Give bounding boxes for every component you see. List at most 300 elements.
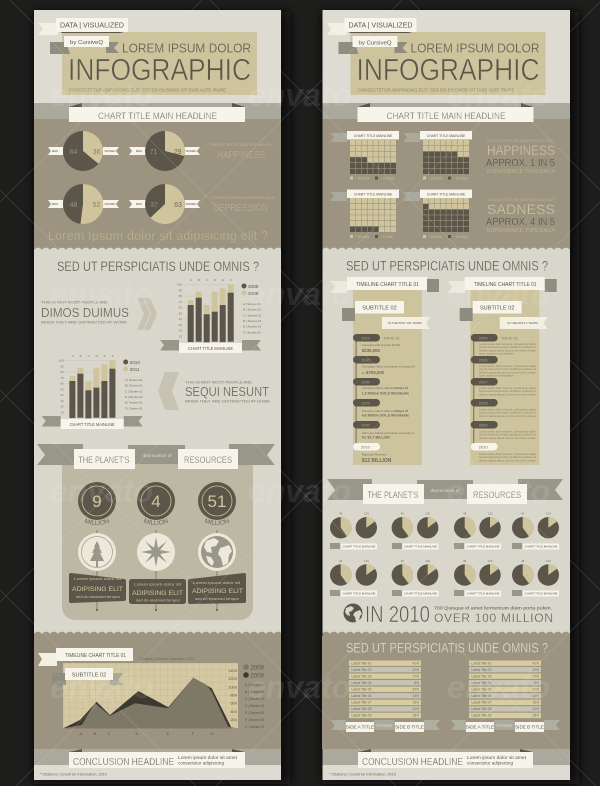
header: right: CONSECTETUR ADIPISICING ELIT, SED DO EIUSMOD SIT DUIS AUTE IRURE — [358, 88, 515, 92]
stat: 51 million: MILLION — [204, 518, 230, 525]
legend: D | Stories 01 — [243, 319, 261, 323]
text block: sadness approx: SADNESS — [487, 201, 555, 217]
heading: left section two: SED UT PERSPICIATIS UNDE OMNIS ? — [57, 258, 259, 274]
table: right: 28% — [533, 714, 539, 718]
bar chart: lower: E — [104, 354, 106, 358]
axis labels: G — [210, 731, 214, 736]
table: right: Latest Title 06 — [472, 694, 492, 698]
text block: dimos duimus: THIS IS WHY MOST PEOPLE ARE — [41, 300, 109, 304]
pie chart: happiness 64/36: MEN — [52, 149, 58, 153]
watermark: envato — [248, 669, 351, 705]
small pie charts: 129 — [364, 559, 369, 563]
side titles: right: SIDE B TITLE — [515, 724, 544, 730]
timeline column 2: TIMELINE CHART TITLE 01 — [474, 282, 537, 288]
text block: dimos duimus: DIMOS DUIMUS — [41, 305, 129, 320]
paragraphs: dolore magna aliqua ut enim ad minim veniam — [479, 348, 537, 352]
legend: A | Stories 01 — [125, 378, 143, 382]
bar chart: upper: 30 — [179, 323, 182, 327]
bar chart: lower: 30 — [60, 399, 64, 403]
watermark: envato — [447, 669, 550, 705]
waffle chart: bottom left: ~ 43 Units — [355, 235, 370, 239]
text block: sadness approx: APPROX. 4 IN 5 — [486, 217, 555, 228]
small pie charts: CHART TITLE MAINLINE — [525, 592, 558, 596]
paragraphs: sed do eiusmod tempor incididunt ut labore et — [479, 367, 536, 371]
timeline column 2: TOPIC 01 — [501, 336, 518, 340]
bar chart: upper: 60 — [179, 306, 182, 310]
timeline column 1: SUBTITLE 02 — [362, 306, 397, 312]
small pie charts: 48 — [401, 559, 404, 563]
pills — [471, 334, 498, 450]
text block: dimos duimus: WHEN THEY ARE DISTRACTED AT WORK — [41, 320, 128, 324]
pie chart: depression 48/52: 48 — [70, 202, 77, 209]
citation: * Citations | Credit for Information, 2010 — [138, 657, 194, 661]
bar chart: upper: A — [190, 278, 192, 282]
paragraphs: dolore magna aliqua ut enim ad minim veniam — [479, 458, 537, 462]
small pie charts: 129 — [487, 559, 493, 563]
timeline column 1: TIMELINE CHART TITLE 01 — [356, 282, 419, 288]
legend — [123, 360, 143, 410]
waffle chart: top left: ~ 19 Units — [380, 176, 395, 180]
timeline column 2: SUBTITLE 02 — [480, 306, 514, 312]
events: Company Name purchases Company B — [362, 365, 415, 369]
table: left: Latest Title 05 — [352, 688, 372, 692]
legend: F | Stories 01 — [243, 330, 261, 334]
table: left — [349, 660, 421, 718]
table: right: Latest Title 08 — [472, 707, 492, 711]
paragraphs: Lorem ipsum dolor sit amet, consectetur adipis — [479, 452, 537, 456]
banner: left — [69, 573, 126, 603]
table: left: 87% — [413, 688, 419, 692]
header: right: DATA | VISUALIZED — [348, 22, 412, 30]
legend: E | Stories 01 — [243, 325, 261, 329]
table: left: 87% — [413, 668, 419, 672]
timeline column 1: 1970 — [361, 400, 371, 406]
table: left: 28% — [413, 714, 419, 718]
bar chart: upper: 20 — [179, 329, 182, 333]
table: right: 27% — [533, 674, 539, 678]
legend: C | Stories 07 — [245, 725, 264, 729]
small pie charts — [330, 512, 559, 596]
axis labels: 400 — [230, 709, 238, 714]
icon: chevrons right — [137, 298, 157, 330]
watermark: envato — [447, 77, 550, 113]
header: right — [326, 18, 546, 95]
subtitle: LOREM IPSUM DOLOR — [122, 40, 251, 56]
timeline column 2: 2006 — [479, 358, 488, 362]
text block: sequi nesunt — [185, 380, 271, 404]
bar chart: upper: 80 — [179, 294, 182, 298]
legend: D | Stories 04 — [245, 704, 264, 708]
connector lines — [97, 530, 217, 610]
side titles: right — [451, 720, 560, 732]
side titles: left: Exchange — [377, 724, 392, 728]
chart area — [63, 663, 238, 728]
table: left: 41% — [413, 662, 419, 666]
watermark: envato — [50, 276, 153, 312]
axis labels: 1000 — [228, 684, 238, 690]
conclusion: right — [358, 749, 533, 768]
bar chart: upper: D — [214, 278, 217, 282]
timeline column 1: 1910 — [361, 336, 371, 340]
table: left: 64% — [413, 694, 419, 698]
timeline column 2: 2007 — [479, 380, 488, 384]
stat: over 100 million: 700 Quisque id amet fermentum diam porta pulvin. — [434, 606, 552, 610]
legend: F | Stories 06 — [245, 718, 264, 722]
text block: happiness approx — [486, 139, 556, 175]
side titles: right: Exchange — [497, 724, 512, 728]
pie chart: happiness 71/29: WOMEN — [185, 149, 197, 153]
paragraphs: dolore magna aliqua ut enim ad minim veniam — [479, 392, 537, 396]
table: left: 41% — [413, 707, 419, 711]
paragraphs: sed do eiusmod tempor incididunt ut labore et — [479, 345, 536, 349]
paragraphs: sed do eiusmod tempor incididunt ut labore et — [479, 411, 536, 415]
watermark: envato — [50, 669, 153, 705]
ribbon: planet heading: THE PLANET'S — [78, 455, 130, 465]
tagline: CONSECTETUR ADIPISICING ELIT, SED DO EIUSMOD SIT DUIS AUTE IRURE — [69, 88, 226, 92]
small pie charts: 129 — [487, 512, 493, 516]
conclusion: left: consectetur adipisicing — [178, 760, 224, 766]
stat: 4 million: 4 — [151, 492, 161, 511]
paragraphs: quis nostrud exercitation — [479, 374, 514, 378]
stat: over 100 million: OVER 100 MILLION — [434, 611, 553, 625]
legend: B | Stories 01 — [125, 384, 143, 388]
legend: B | Stories 02 — [245, 690, 264, 694]
stat: 9 million: MILLION — [84, 518, 110, 525]
side titles: left: SIDE A TITLE — [346, 724, 374, 730]
axis labels: E — [167, 731, 170, 736]
pie chart: depression 37/63: MEN — [136, 202, 142, 206]
table: left: Latest Title 07 — [352, 701, 372, 705]
text block: depression: CONSECTETUR ADIPISICING ELIT — [211, 196, 276, 200]
paragraphs: sed do eiusmod tempor incididunt ut labore et — [479, 389, 536, 393]
timeline column 1: 1990 — [361, 422, 371, 428]
waffle chart: bottom right: CHART TITLE MAINLINE — [427, 192, 466, 196]
table: right: Latest Title 03 — [472, 674, 492, 678]
icon: globe small — [344, 604, 362, 622]
axis labels — [80, 668, 238, 736]
legend: 2011 — [130, 367, 140, 372]
paragraphs: sed do eiusmod tempor incididunt ut labore et — [479, 433, 536, 437]
banner: left: ADIPISING ELIT — [72, 586, 123, 593]
byline ribbon — [50, 36, 119, 54]
small pie charts: CHART TITLE MAINLINE — [404, 545, 437, 549]
table: right — [469, 660, 541, 718]
paragraphs: dolore magna aliqua ut enim ad minim veniam — [479, 436, 537, 440]
text block: sadness approx: EXPERIENCE THIS DAILY — [487, 228, 555, 234]
table: left: 8% — [414, 681, 419, 685]
bar chart: lower: 10 — [60, 410, 64, 414]
conclusion: right: CONCLUSION HEADLINE — [362, 756, 463, 768]
icon: chevrons left — [158, 372, 179, 410]
pie chart: depression 37/63: 37 — [150, 202, 158, 209]
bar chart: lower: 80 — [60, 370, 64, 374]
text block: happiness approx: EXPERIENCE THIS DAILY — [487, 169, 555, 175]
bar chart: upper: 50 — [179, 311, 182, 315]
pie chart: happiness 71/29: 71 — [150, 149, 157, 156]
paragraphs: Lorem ipsum dolor sit amet, consectetur adipis — [479, 342, 537, 346]
waffle chart: top left — [330, 131, 399, 180]
bar chart: lower: F — [112, 354, 114, 358]
bar chart: upper: C — [206, 278, 209, 282]
table: left: Latest Title 04 — [352, 681, 372, 685]
timeline column 1: TOPIC 01 — [383, 336, 400, 340]
axis labels: F — [192, 731, 195, 736]
main title: INFOGRAPHIC — [68, 52, 251, 87]
table: right: Latest Title 09 — [472, 714, 492, 718]
timeline column 1: $12 BILLION — [362, 458, 392, 464]
small pie charts: 129 — [546, 559, 551, 563]
legend: A | Stories 01 — [245, 683, 264, 687]
axis labels: 200 — [230, 717, 238, 722]
table: right: Latest Title 02 — [472, 668, 492, 672]
stat: 9 million — [78, 482, 116, 525]
legend — [242, 284, 261, 334]
paragraphs: sed do eiusmod tempor incididunt ut labore et — [479, 455, 536, 459]
text block: dimos duimus — [41, 300, 129, 324]
waffle chart: top right — [403, 131, 472, 180]
events: Company Name debuts Widget #2 — [362, 409, 409, 413]
table: left: 15% — [413, 701, 419, 705]
pie chart: happiness 64/36: WOMEN — [104, 149, 116, 153]
text block: happiness approx: HAPPINESS — [487, 142, 555, 158]
legend: 2009 — [250, 674, 265, 680]
bar chart: lower: 90 — [60, 364, 64, 368]
banner: right: Lorem ipsum dolor sit — [193, 581, 241, 585]
waffle chart: top right: CHART TITLE MAINLINE — [427, 134, 466, 138]
table: right: Latest Title 05 — [472, 688, 492, 692]
axis labels: B — [94, 731, 97, 736]
watermark: envato — [248, 276, 351, 312]
axis labels: A — [80, 731, 83, 736]
ribbon: right planet heading: THE PLANET'S — [368, 490, 418, 500]
timeline column 2: 2009 — [479, 422, 488, 428]
bar chart: upper: 90 — [179, 288, 182, 292]
small pie charts: 48 — [339, 559, 343, 563]
bar chart: lower — [42, 354, 143, 429]
small pie charts: CHART TITLE MAINLINE — [525, 545, 558, 549]
bar chart: upper: F — [230, 278, 232, 282]
pie captions — [330, 543, 522, 596]
table: left: Latest Title 01 — [352, 662, 372, 666]
data visualized ribbon: DATA | VISUALIZED — [60, 22, 124, 30]
stat: 4 million: MILLION — [144, 518, 168, 525]
chart ribbon: CHART TITLE MAINLINE — [70, 422, 115, 427]
watermark: envato — [248, 473, 351, 509]
legend: C | Stories 03 — [245, 697, 264, 701]
timeline column 1: 1.3 Million SOLD Worldwide — [362, 392, 409, 396]
legend: E | Stories 05 — [245, 711, 264, 715]
legend: 2008 — [248, 284, 259, 289]
text block: sadness approx: CONSECTETUR ADIPISICING ELIT — [487, 198, 556, 202]
legend: A | Stories 01 — [243, 302, 261, 306]
paragraphs: quis nostrud exercitation — [479, 352, 514, 356]
watermark: envato — [447, 473, 550, 509]
timeline column 1: IN THE PAST 100 YEARS — [388, 321, 422, 325]
small pie charts: 48 — [339, 512, 343, 516]
conclusion: right: consectetur adipisicing — [467, 760, 513, 766]
small pie charts: 48 — [463, 512, 467, 516]
timeline column 2 — [448, 277, 557, 465]
text block: happiness: CONSECTETUR ADIPISICING ELIT — [207, 143, 276, 147]
stat: 51 million: 51 — [208, 492, 226, 511]
legend: 2008 — [250, 666, 265, 672]
legend: 2009 — [248, 291, 259, 296]
paragraphs: dolore magna aliqua ut enim ad minim veniam — [479, 414, 537, 418]
small pie charts: CHART TITLE MAINLINE — [343, 592, 376, 596]
small pie charts: 129 — [425, 512, 431, 516]
waffle chart: bottom left: CHART TITLE MAINLINE — [354, 192, 393, 196]
conclusion: right: Lorem ipsum dolor sit amet — [467, 755, 527, 760]
text block: happiness approx: CONSECTETUR ADIPISICING ELIT — [487, 139, 556, 143]
banner: right: sed do eiusmod tempor — [195, 597, 240, 601]
header: right: LOREM IPSUM DOLOR — [410, 40, 540, 56]
pie chart: depression 37/63: WOMEN — [185, 202, 197, 206]
ribbon: right planet heading — [327, 479, 563, 504]
table: right: 41% — [533, 662, 539, 666]
bar chart: lower: C — [88, 354, 91, 358]
waffle chart: bottom left: ~ 5 Units — [380, 235, 393, 239]
ribbon: timeline title — [38, 648, 133, 666]
table: left: Latest Title 08 — [352, 707, 372, 711]
legend — [243, 664, 265, 729]
small pie charts: CHART TITLE MAINLINE — [404, 592, 437, 596]
pie chart: depression 48/52: WOMEN — [104, 202, 116, 206]
banner: right: ADIPISING ELIT — [192, 588, 243, 595]
paragraphs — [479, 342, 537, 462]
bar chart: upper: B — [198, 278, 200, 282]
timeline line — [472, 338, 475, 447]
ribbon: planet heading: RESOURCES — [184, 455, 232, 465]
banner: center: sed do eiusmod tempor — [136, 598, 181, 602]
side titles: left — [331, 720, 440, 732]
side titles: left: SIDE B TITLE — [395, 724, 424, 730]
legend: E | Stories 01 — [125, 401, 143, 405]
axis labels: D — [136, 731, 139, 736]
bar chart: lower: 70 — [60, 376, 64, 380]
data visualized ribbon — [38, 18, 128, 35]
pie chart: depression 48/52 — [48, 184, 119, 224]
banner: center: ADIPISING ELIT — [132, 590, 183, 597]
waffle chart: top right: ~ 30 Units — [453, 176, 468, 180]
timeline column 2: IN THE PAST 4 YEARS — [507, 321, 538, 325]
table: right: 8% — [534, 681, 539, 685]
timeline column 2: 2005 — [479, 336, 488, 340]
timeline column 1: for $750,000 — [362, 370, 385, 375]
table: right: 87% — [533, 688, 539, 692]
axis labels: 1200 — [228, 676, 238, 681]
timeline column 2: 2008 — [479, 400, 488, 406]
stat: in 2010: IN 2010 — [365, 601, 430, 627]
bar chart: upper: 100 — [177, 282, 182, 286]
side titles: right: SIDE A TITLE — [466, 724, 494, 730]
conclusion: left: Lorem ipsum dolor sit amet — [178, 755, 238, 760]
table: left: Latest Title 02 — [352, 668, 372, 672]
ribbon: right planet heading: deprecation of — [430, 488, 460, 493]
small pie charts: CHART TITLE MAINLINE — [467, 592, 500, 596]
paragraphs: Lorem ipsum dolor sit amet, consectetur adipis — [479, 386, 537, 390]
heading: right section two: SED UT PERSPICIATIS UNDE OMNIS ? — [346, 258, 548, 274]
ribbon: right planet heading: RESOURCES — [473, 490, 521, 500]
bar chart: upper — [160, 278, 261, 353]
subtitle ribbon: SUBTITLE 02 — [72, 672, 106, 678]
title block — [62, 32, 257, 95]
conclusion: left: CONCLUSION HEADLINE — [73, 756, 174, 768]
table: left: 27% — [413, 674, 419, 678]
question line: Lorem Ipsum dolor sit adipisicing elit ? — [48, 229, 268, 243]
small pie charts: 48 — [463, 559, 467, 563]
small pie charts: 129 — [546, 512, 551, 516]
area chart panel — [38, 648, 265, 736]
events — [362, 343, 416, 457]
bar chart: lower: 50 — [60, 387, 64, 391]
bar chart: upper: E — [222, 278, 224, 282]
waffle chart: top left: CHART TITLE MAINLINE — [354, 134, 393, 138]
table: right: 87% — [533, 668, 539, 672]
small pie charts: 48 — [401, 512, 404, 516]
small pie charts: 129 — [364, 512, 369, 516]
heading: right main headline: CHART TITLE MAIN HEADLINE — [386, 111, 506, 121]
stat: 4 million — [137, 482, 175, 525]
bar chart: lower: D — [96, 354, 99, 358]
waffle chart: top left: ~ 29 Units — [355, 176, 370, 180]
legend: F | Stories 01 — [125, 406, 143, 410]
text block: depression: DEPRESSION — [213, 203, 268, 214]
pie chart: depression 37/63: 63 — [174, 202, 182, 209]
watermark: envato — [447, 276, 550, 312]
timeline column 1: 2010 — [361, 444, 371, 450]
events: Company Name debuts Widget #1 — [362, 386, 409, 390]
paragraphs: dolore magna aliqua ut enim ad minim veniam — [479, 370, 537, 374]
table: left: Latest Title 03 — [352, 674, 372, 678]
stat: 9 million: 9 — [92, 492, 102, 511]
legend: 2010 — [130, 360, 140, 365]
waffle chart: bottom right: ~ 15 Units — [428, 235, 443, 239]
timeline column 1: 4.6 Million SOLD Worldwide — [362, 414, 409, 418]
panel: left poster — [34, 10, 281, 780]
legend: C | Stories 01 — [125, 389, 143, 393]
banner: left: sed do eiusmod tempor — [76, 595, 121, 599]
watermark — [50, 77, 550, 705]
text block: depression — [211, 196, 276, 214]
table: left: Latest Title 09 — [352, 714, 372, 718]
table: right: 64% — [533, 694, 539, 698]
banner: left: Lorem ipsum dolor sit — [74, 577, 122, 581]
small pie charts: 129 — [425, 559, 431, 563]
ribbon: planet heading — [37, 444, 275, 469]
heading: right lower section: SED UT PERSPICIATIS UNDE OMNIS ? — [346, 640, 548, 656]
waffle chart: bottom left — [330, 190, 399, 239]
paragraphs: Lorem ipsum dolor sit amet, consectetur adipis — [479, 408, 537, 412]
bar chart: lower: A — [72, 354, 74, 358]
text block: sequi nesunt: THIS IS WHY MOST PEOPLE ARE — [185, 380, 253, 384]
text block: sequi nesunt: WHEN THEY ARE DISTRACTED AT HOME — [185, 400, 271, 404]
waffle chart: top right: ~ 18 Units — [428, 176, 443, 180]
ribbon: planet heading: deprecation of — [142, 453, 172, 458]
text block: happiness: HAPPINESS — [217, 150, 265, 161]
bar chart: lower: B — [80, 354, 82, 358]
bar chart: lower: 60 — [60, 382, 64, 386]
table: right: Latest Title 04 — [472, 681, 492, 685]
panel: right poster — [322, 10, 570, 780]
legend: C | Stories 01 — [243, 313, 261, 317]
pie chart: happiness 64/36: 64 — [70, 149, 77, 156]
header: left — [38, 18, 257, 95]
axis labels: C — [108, 731, 111, 736]
ribbon — [330, 281, 347, 293]
pills — [353, 334, 380, 450]
bar chart: lower: 100 — [59, 358, 64, 362]
legend: D | Stories 01 — [125, 395, 143, 399]
